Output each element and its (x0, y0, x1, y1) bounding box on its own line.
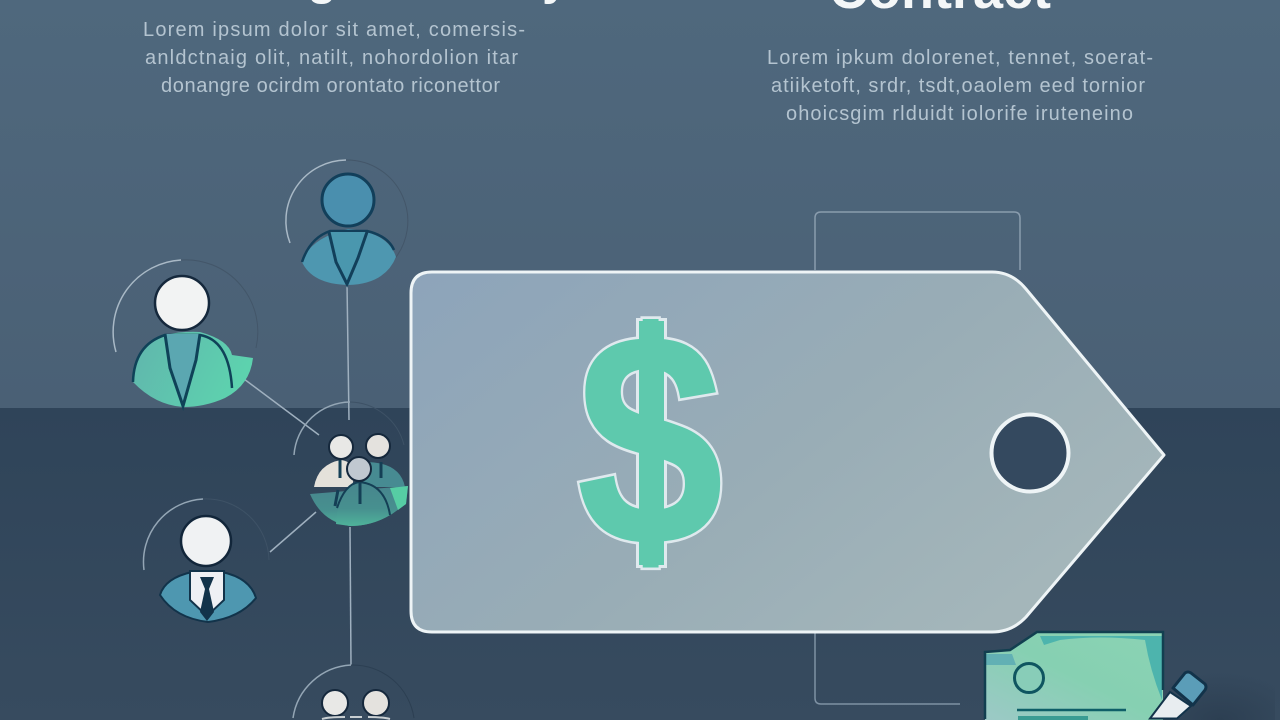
text block: left description: anldctnaig olit, natilt, nohordolion itar (145, 47, 518, 69)
connector lines between people (244, 284, 351, 665)
price tag (411, 271, 1164, 632)
text block: left description: donangre ocirdm orontato riconettor (161, 75, 500, 97)
text block: right description: atiiketoft, srdr, tsdt,oaolem eed tornior (771, 75, 1145, 97)
shadow beside document (1165, 660, 1275, 720)
frame behind tag: bottom (815, 632, 960, 704)
icon: tag hole (992, 414, 1068, 492)
text block: right description: ohoicsgim rlduidt iolorife iruteneino (786, 103, 1133, 125)
icon: pencil (1150, 672, 1206, 718)
text block: right description: Lorem ipkum dolorenet, tennet, soerat- (767, 47, 1153, 69)
frame behind tag: top (815, 212, 1020, 270)
icon: dollar sign: $ (577, 271, 723, 608)
text block: left description: Lorem ipsum dolor sit amet, comersis- (143, 19, 525, 41)
icon: group at bottom (cropped) (293, 665, 414, 719)
icon: dollar sign: $ (577, 271, 723, 608)
background: lower band (0, 408, 1280, 720)
text block: right description (767, 47, 1153, 125)
icon: contract document (985, 632, 1206, 720)
background: upper band (0, 0, 1280, 408)
icon: person top, blue (286, 160, 408, 285)
icon: person lower left, white shirt (143, 499, 269, 622)
text block: left description (143, 19, 525, 97)
icon: person left, teal (113, 260, 258, 407)
icon: group of three people (294, 402, 408, 526)
